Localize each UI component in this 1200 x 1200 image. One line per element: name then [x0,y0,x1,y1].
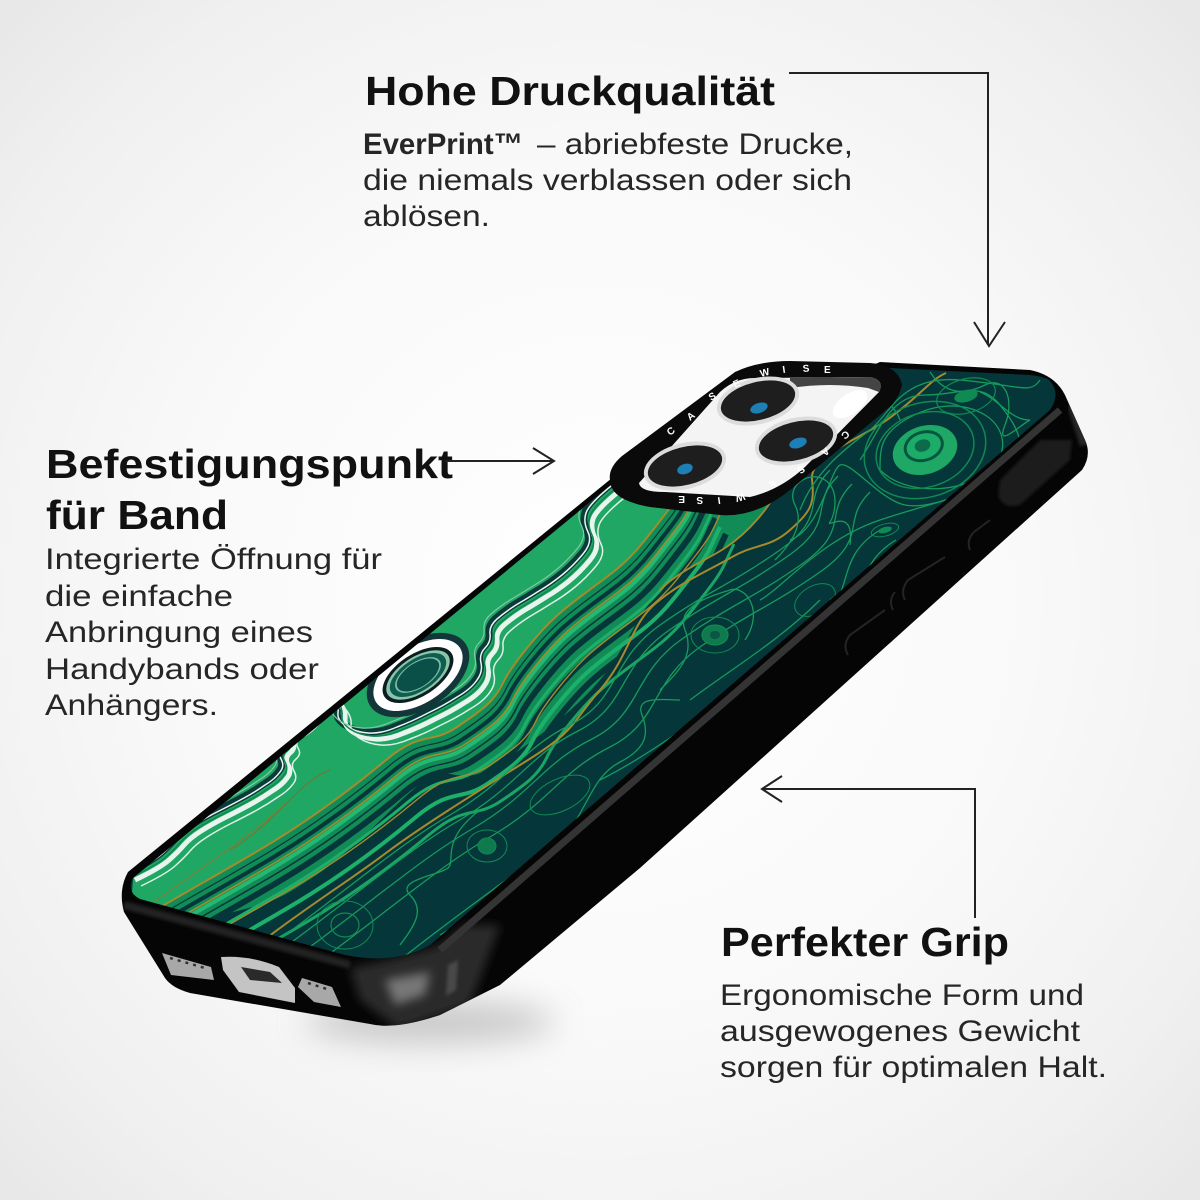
case body [122,362,1088,1030]
description: EverPrint™ [363,128,523,161]
left speaker [162,953,214,980]
agate eye [366,632,470,718]
callout: Befestigungspunkt [45,441,453,722]
right speaker [298,978,341,1007]
phone case illustration [100,340,1100,1030]
malachite spot top [864,377,996,500]
striped green band [164,504,768,918]
brand ring text: CASEWISE [665,363,831,438]
description: die niemals verblassen oder sich [363,164,852,197]
description [45,543,382,722]
description [363,128,853,233]
lens left [639,434,731,498]
arrow: strap attachment [445,448,554,474]
lens right [750,409,842,473]
dark stripes [172,510,736,938]
bottom ports [162,953,341,1007]
brand ring text [665,363,851,505]
callout: Perfekter Grip [720,919,1107,1084]
green contour lines [250,370,1040,982]
bright green band [132,485,668,906]
charging port [221,957,295,1003]
description: Integrierte Öffnung für [45,543,382,576]
lens top [712,369,804,433]
phone shadow [305,1000,555,1044]
marble back panel [130,368,1056,958]
heading [46,441,453,538]
description: Handybands oder [45,653,319,686]
heading: Perfekter Grip [721,919,1009,965]
side buttons [845,520,990,655]
gold veins [130,373,946,963]
description: die einfache [45,580,233,613]
description: Ergonomische Form und [720,979,1084,1012]
arrow: print quality [789,73,1005,346]
arrow: grip [762,776,975,918]
small spots [317,521,900,949]
heading: Befestigungspunkt [46,441,453,487]
heading: für Band [46,492,228,538]
speaker dots right [308,983,330,990]
speaker dots left [170,958,205,968]
callout: Hohe Druckqualität [363,68,853,233]
camera window [639,377,881,497]
description: sorgen für optimalen Halt. [720,1051,1107,1084]
camera bump [610,361,902,515]
description: Anbringung eines [45,616,313,649]
description: Anhängers. [45,689,218,722]
description [720,979,1107,1084]
brand ring text: CASEWISE [678,428,851,505]
white marble veins [122,481,624,886]
description: ablösen. [363,200,490,233]
description: – abriebfeste Drucke, [537,128,853,161]
description: ausgewogenes Gewicht [720,1015,1081,1048]
heading: Hohe Druckqualität [365,68,775,114]
